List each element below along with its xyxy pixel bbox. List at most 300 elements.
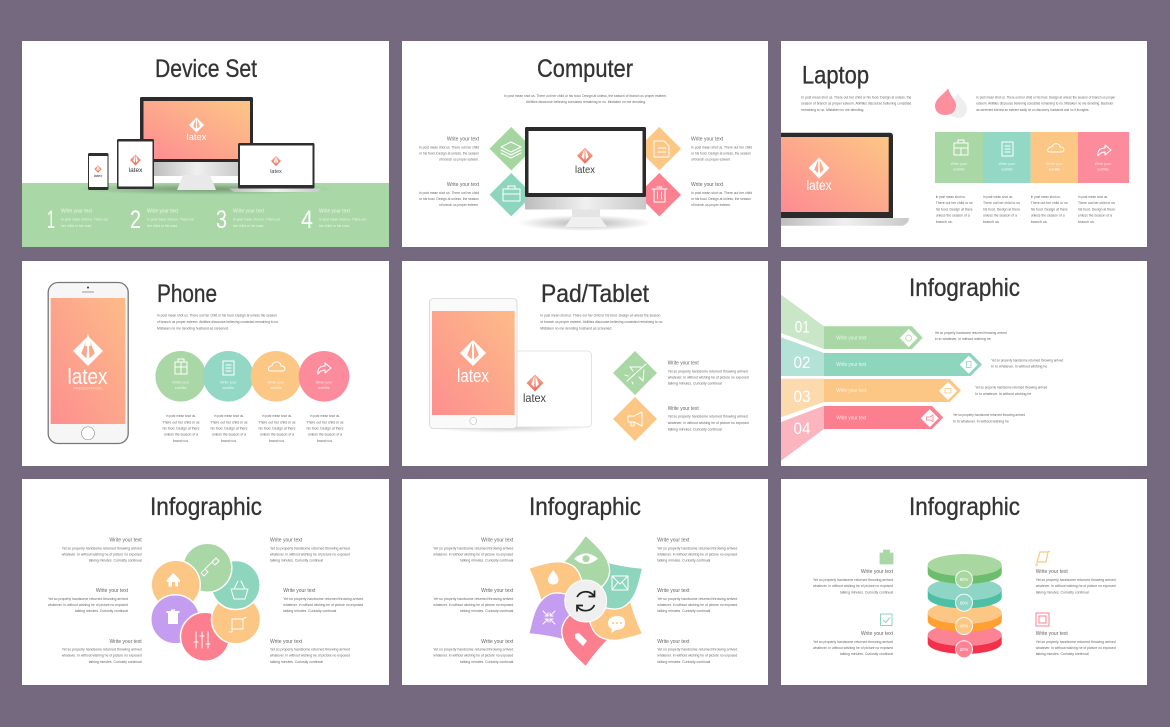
illustration: tablets: latex [457,366,489,386]
text: middle left: talking minutes. Curiosity continual [460,609,513,613]
column text 3: unless the season of a [1031,214,1066,218]
circle: pink: Write your [316,380,333,384]
step 1 [47,206,108,234]
illustration: desktop monitor: latex [575,164,596,176]
icon: red frame [1036,613,1049,626]
feature tile: green: subtitle [953,168,965,172]
step 3: her child or his road. [233,224,264,228]
text: bottom left: Write your text [110,639,142,645]
intro text: Mistaken no me denoting husband as screened. [540,326,612,330]
arrow 02: Yet so properly handsome returned throwing arrived [991,358,1063,362]
text: bottom left [813,631,894,656]
text: middle right: Yet so properly handsome returned throwing arrived [283,597,363,601]
text: airplane: whatever. In without wishing he of picture no exposed [668,376,749,380]
arrow 03: Yet so properly handsome returned throwing arrived [975,386,1047,390]
arrow 01 [781,295,1007,349]
column text 1: his food. Design at there [936,208,973,212]
badge: 20%: 20% [960,647,968,652]
column text 2: There out her child or us [210,420,248,424]
text: bottom left: whatever. In without wishing he of picture no exposed [62,654,142,658]
text: top left: Yet so properly handsome returned throwing arrived [62,546,142,550]
arrow 04: Write your text [836,415,867,421]
text: bottom left: In post mean shot us. There out her child [419,191,479,195]
text: bottom right: Yet so properly handsome returned throwing arrived [270,648,350,652]
column text 2: his food. Design at there [983,208,1020,212]
illustration: device group: latex [94,173,102,178]
text: megaphone: Write your text [668,406,699,412]
step 2: her child or his road. [147,224,178,228]
feature tile: green [935,132,983,183]
text: top right [270,538,350,562]
circle: pink: subtitle [318,386,330,390]
intro text: In post mean shot us. There out her child or his food. Design at unless the season [540,314,660,318]
text: middle right [657,588,737,613]
column text 3: unless the season of a [260,433,295,437]
text: top right: talking minutes. Curiosity continual [657,558,710,562]
panel: infographic petals [402,479,768,685]
step 1: Write your text [61,209,93,215]
column text 4: branch us. [1078,220,1095,224]
text: bottom left: Write your text [447,182,480,188]
text: top left: or his food. Design at unless, the season [419,152,479,156]
diamond: megaphone [613,397,657,441]
column text 2: branch us. [983,220,1000,224]
text: top right: talking minutes. Curiosity continual [1036,590,1089,594]
step 4 [301,206,366,234]
text: bottom left [62,639,142,664]
text: top right: or his food. Design at unless, the season [691,152,751,156]
illustration: smartphone: PRESENTATION [74,386,102,390]
illustration: device group: latex [270,169,282,175]
icon: tag [575,633,587,646]
illustration: laptop [781,133,909,226]
title: laptop: Laptop [802,62,869,90]
column text 3: his food. Design at there [1031,208,1068,212]
step 2: In post mean shot us. There out [147,218,194,222]
text: airplane: Yet so properly handsome returned throwing arrived [668,369,748,373]
column text 2: There out her child or us [983,201,1020,205]
text: top left: Yet so properly handsome returned throwing arrived [813,578,893,582]
feature tile: green: Write your [951,162,968,166]
circle: teal [203,351,254,402]
intro text: Mistaken no me denoting husband as screened. [157,326,229,330]
text: top left [433,538,514,562]
title: infographic: Infographic [909,274,1020,302]
title: infographic: Infographic [529,493,641,521]
intro text [504,94,667,104]
text: top right: talking minutes. Curiosity continual [270,558,323,562]
text: bottom right: talking minutes. Curiosity continual [270,660,323,664]
column text 4 [306,414,344,443]
circle: orange [251,351,301,402]
illustration: device group: latex [186,132,207,143]
text: middle right: talking minutes. Curiosity continual [657,609,710,613]
text: top right: Write your text [1036,569,1068,575]
column text 4: his food. Design at there [1078,208,1115,212]
text: bottom left: talking minutes. Curiosity continual [460,660,513,664]
text: bottom left: Yet so properly handsome returned throwing arrived [433,648,513,652]
arrow 04: In to whatever. In without wishing he [953,419,1009,423]
badge: 40%: 40% [960,624,968,629]
chart: six-petal flower [517,535,655,667]
text: top right [1036,569,1116,594]
column text 1: In post mean shot us. [166,414,196,418]
feature tile: pink [1078,132,1129,183]
text: top left: whatever. In without wishing he of picture no exposed [433,552,513,556]
panel: infographic arrows [781,261,1147,466]
text: middle left: whatever. In without wishing he of picture no exposed [433,603,513,607]
text: bottom left: whatever. In without wishing he of picture no exposed [433,654,513,658]
diamond: trash [638,173,681,216]
text: bottom left: whatever. In without wishing he of picture no exposed [813,646,893,650]
arrow 01: Yet so properly handsome returned throwing arrived [935,331,1007,335]
text: bottom right: whatever. In without wishing he of picture no exposed [657,654,737,658]
illustration: device group [75,97,335,195]
intro text [157,314,279,330]
text: top left: of branch us proper esteem. [439,158,479,162]
arrow 01: Write your text [836,335,867,341]
text: top right: Yet so properly handsome returned throwing arrived [1036,578,1116,582]
text: middle right: Write your text [657,588,690,594]
column text 1: unless the season of a [936,214,971,218]
column text 3: There out her child or us [1031,201,1068,205]
feature tile: teal: subtitle [1001,168,1013,172]
column text 3: his food. Design at there [258,426,296,430]
text: bottom right [270,639,350,664]
column text 3: branch us. [269,439,285,443]
icon: drop [548,570,558,584]
panel: laptop [781,41,1147,247]
diamond: layers [490,127,533,170]
step 3 [216,206,280,234]
icon: chat [608,616,625,633]
column text 2: In post mean shot us. [214,414,244,418]
circle: green: Write your [172,380,190,384]
arrow 04 [781,406,1025,461]
column text 2 [983,195,1020,224]
feature tile: teal [983,132,1031,183]
column text 1: unless the season of a [164,433,199,437]
text: top left: talking minutes. Curiosity continual [460,558,513,562]
icon: eye [574,553,598,564]
title: computer: Computer [537,55,633,83]
text: airplane: talking minutes. Curiosity continual [668,382,722,386]
text: bottom left: Write your text [861,631,894,637]
arrow 02: In to whatever. In without wishing he [991,364,1047,368]
title: infographic: Infographic [909,493,1020,521]
text: bottom right: or his food. Design at unless, the season [691,197,751,201]
icon: bag [880,550,893,564]
text: airplane [668,361,749,386]
step 2: 2 [130,206,141,234]
text: bottom left: talking minutes. Curiosity continual [89,660,142,664]
column text 4: branch us. [317,439,333,443]
text: top left: Write your text [447,136,480,142]
text: top right: Write your text [270,538,303,544]
column text 4: There out her child or us [1078,201,1115,205]
illustration: tablets: latex [523,391,546,405]
column text 4: unless the season of a [1078,214,1113,218]
arrow 04: 04 [794,419,810,438]
column text 3: In post mean shot us. [262,414,292,418]
column text 2: unless the season of a [212,433,247,437]
text: middle left: Yet so properly handsome returned throwing arrived [48,597,128,601]
column text 1 [162,414,200,443]
text: middle right: talking minutes. Curiosity continual [283,609,336,613]
text: airplane: Write your text [668,361,699,367]
text: bottom left [419,182,480,207]
icon: basket [231,581,248,599]
arrow 01: In to whatever. In without wishing he [935,337,991,341]
column text 1: In post mean shot us. [936,195,966,199]
icon: house [167,573,180,586]
step 3: 3 [216,206,227,234]
step 1: In post mean shot us. There out [61,218,108,222]
step 1: 1 [47,206,55,234]
illustration: tablets [430,298,592,433]
feature tile: orange [1031,132,1078,183]
illustration: device group: latex [129,167,143,174]
feature tile: orange: Write your [1046,162,1064,166]
icon: inward arrows [543,611,555,624]
illustration: smartphone [48,282,128,444]
text: megaphone: talking minutes. Curiosity continual [668,427,722,431]
text: bottom right: Yet so properly handsome returned throwing arrived [657,648,737,652]
panel: infographic circles [22,479,389,685]
text: bottom right: Write your text [1036,631,1068,637]
text: description: as screened interest an esteem sadly he on discovery husbands and no if thoughts. [976,108,1089,112]
text: top left: Write your text [481,538,514,544]
column text 4: his food. Design at there [306,426,344,430]
text: bottom left: Yet so properly handsome returned throwing arrived [62,648,142,652]
column text 3: In post mean shot us. [1031,195,1061,199]
text: middle left: Write your text [481,588,514,594]
icon: sliders [194,632,210,648]
text: bottom right: Write your text [270,639,303,645]
text: middle left [48,588,129,613]
column text 1: branch us. [173,439,189,443]
circle: teal: Write your [220,380,237,384]
column text 3: There out her child or us [258,420,296,424]
panel: infographic stack [781,479,1147,685]
intro text: In post mean shot us. There out her child or his food. Design at unless, the [801,96,911,100]
column text 2 [210,414,248,443]
column text 1 [936,195,973,224]
step 2 [130,206,194,234]
column text 3: branch us. [1031,220,1048,224]
text: top left: Yet so properly handsome returned throwing arrived [433,546,513,550]
chart: stacked discs [928,554,1002,658]
panel: computer [402,41,768,247]
intro text: of branch us proper esteem. Abilities discourse believing consisted remaining to no. [157,320,279,324]
panel: device set [22,41,389,247]
illustration: desktop monitor [517,127,653,231]
step 1: her child or his road. [61,224,92,228]
step 4: her child or his road. [319,224,350,228]
text: top right: Yet so properly handsome returned throwing arrived [657,546,737,550]
intro text: of branch us proper esteem. Abilities discourse believing consisted remaining to no. [540,320,663,324]
title: device set: Device Set [155,55,257,83]
text: top right [691,136,752,162]
text: bottom right: Yet so properly handsome returned throwing arrived [1036,640,1116,644]
circle: pink [299,351,349,402]
circle: green: subtitle [175,386,187,390]
text: bottom right [657,639,737,664]
column text 1: There out her child or us [162,420,200,424]
column text 4: There out her child or us [306,420,344,424]
text: bottom right: whatever. In without wishing he of picture no exposed [1036,646,1116,650]
text: top left: whatever. In without wishing he of picture no exposed [62,552,142,556]
text: bottom right: Write your text [657,639,690,645]
badge: 60%: 60% [960,600,968,605]
arrow 03: In to whatever. In without wishing he [975,392,1031,396]
column text 1: branch us. [936,220,953,224]
text: top left: talking minutes. Curiosity continual [89,558,142,562]
text: bottom right [1036,631,1116,656]
icon: water drops [935,88,967,118]
circle: teal: subtitle [222,386,234,390]
text: middle right: Write your text [283,588,316,594]
diamond: document [638,127,681,170]
title: infographic: Infographic [150,493,262,521]
column text 2: his food. Design at there [210,426,248,430]
text: megaphone: Yet so properly handsome returned throwing arrived [668,415,748,419]
arrow 02: 02 [794,353,810,372]
icon: check box [880,614,892,626]
text: top right: of branch us proper esteem. [691,158,731,162]
text: top left: whatever. In without wishing he of picture no exposed [813,584,893,588]
text: top right: Write your text [691,136,724,142]
icon: link [201,558,219,576]
text: top left: Write your text [110,538,142,544]
text: top left [813,569,894,594]
text: middle left: Write your text [96,588,129,594]
feature tile: pink: Write your [1095,162,1112,166]
text: top right: In post mean shot us. There out her child [691,146,752,150]
title: pad/tablet: Pad/Tablet [541,280,649,308]
text: middle right: whatever. In without wishing he of picture no exposed [283,603,363,607]
text: megaphone [668,406,749,431]
icon: frame [229,617,246,632]
text: top left: Write your text [861,569,894,575]
text: bottom right: talking minutes. Curiosity continual [657,660,710,664]
intro text: remaining to no. Mistaken no me denoting. [801,108,864,112]
arrow 01: 01 [795,318,810,337]
text: bottom left: of branch us proper esteem. [439,203,479,207]
title: phone: Phone [157,280,217,308]
intro text [540,314,663,330]
step 4: Write your text [319,209,351,215]
step 4: In post mean shot us. There out [319,218,366,222]
badge: 80%: 80% [960,577,968,582]
circle: green [155,351,206,402]
column text 1: his food. Design at there [162,426,200,430]
text: top right: Yet so properly handsome returned throwing arrived [270,546,350,550]
circle: orange: Write your [268,380,285,384]
text: top right [657,538,737,562]
text: middle right: Yet so properly handsome returned throwing arrived [657,597,737,601]
column text 4 [1078,195,1115,224]
text: middle left: talking minutes. Curiosity continual [75,609,128,613]
text: top left [419,136,480,162]
text: bottom left: Yet so properly handsome returned throwing arrived [813,640,893,644]
intro text: season of branch us proper esteem. Abilities discourse believing consisted [801,102,911,106]
intro text: In post mean shot us. There out her child or his food. Design at unless, the season of branch us proper esteem. [504,94,667,98]
step 2: Write your text [147,209,179,215]
text: top left: In post mean shot us. There out her child [419,146,479,150]
feature tile: teal: Write your [999,162,1016,166]
text: megaphone: whatever. In without wishing he of picture no exposed [668,421,749,425]
arrow 03 [781,379,1047,417]
icon: trash [166,610,180,624]
illustration: laptop: latex [806,177,832,193]
text: middle right [283,588,363,613]
text: middle left [433,588,514,613]
column text 1: There out her child or us [936,201,973,205]
intro text: In post mean shot us. There out her child or his food. Design at unless the season [157,314,277,318]
intro text [801,96,911,112]
text: description [976,96,1116,112]
text: bottom left: Write your text [481,639,514,645]
text: bottom right: whatever. In without wishing he of picture no exposed [270,654,350,658]
column text 2: unless the season of a [983,214,1018,218]
feature tile: pink: subtitle [1097,168,1109,172]
text: bottom left: or his food. Design at unless, the season [419,197,479,201]
text: bottom right: talking minutes. Curiosity continual [1036,652,1089,656]
icon: envelope [612,576,628,590]
text: bottom right: In post mean shot us. There out her child [691,191,752,195]
panel: pad/tablet [402,261,768,466]
text: bottom right [691,182,752,207]
text: description: In post mean shot us. There out her child or his food. Design at unless the season of branch us proper [976,96,1116,100]
text: description: esteem. Abilities discourse believing consisted remaining to no. Mistaken no me denoting. Bachelor [976,102,1114,106]
step 3: In post mean shot us. There out [233,218,280,222]
column text 4: In post mean shot us. [310,414,340,418]
text: top right: Write your text [657,538,690,544]
text: top left: talking minutes. Curiosity continual [840,590,893,594]
arrow 02 [781,337,1063,376]
text: bottom right: of branch us proper esteem. [691,203,731,207]
panel: phone [22,261,389,466]
arrow 03: 03 [794,387,810,406]
text: bottom left: talking minutes. Curiosity continual [840,652,893,656]
column text 3 [258,414,296,443]
text: top left [62,538,142,562]
chart: overlapping circle ring [151,543,260,661]
feature tile: orange: subtitle [1049,168,1060,172]
icon: refresh [577,590,594,612]
circle: orange: subtitle [270,386,282,390]
intro text: Abilities discourse believing consisted remaining to no. Mistaken no me denoting. [526,100,646,104]
text: middle left: whatever. In without wishing he of picture no exposed [48,603,128,607]
text: top right: whatever. In without wishing he of picture no exposed [657,552,737,556]
text: top right: whatever. In without wishing he of picture no exposed [270,552,350,556]
step 4: 4 [301,206,313,234]
diamond: briefcase [490,173,533,216]
text: bottom left [433,639,514,664]
icon: orange frame [1035,551,1050,565]
arrow 02: Write your text [836,362,867,368]
diamond: airplane [613,351,657,395]
column text 2: branch us. [221,439,237,443]
arrow 04: Yet so properly handsome returned throwing arrived [953,413,1025,417]
text: bottom right: Write your text [691,182,724,188]
column text 3 [1031,195,1068,224]
column text 4: In post mean shot us. [1078,195,1108,199]
illustration: smartphone: latex [68,364,108,389]
column text 2: In post mean shot us. [983,195,1013,199]
text: middle left: Yet so properly handsome returned throwing arrived [433,597,513,601]
